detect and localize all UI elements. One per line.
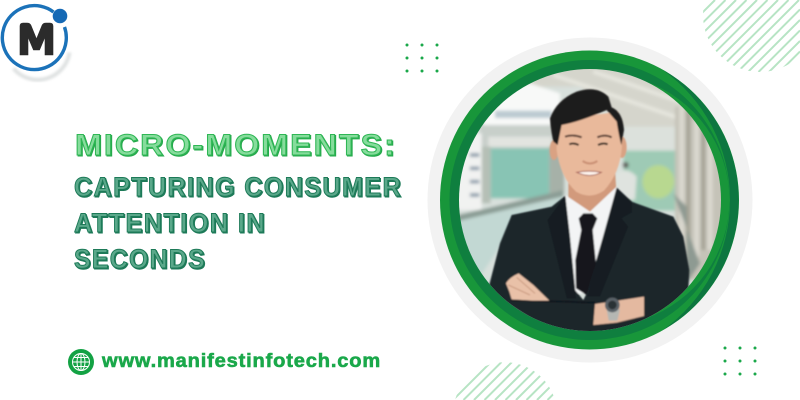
decorative striped circle: bottom <box>455 362 554 400</box>
watch <box>605 298 620 321</box>
subtitle: SECONDS <box>74 244 206 274</box>
outer pale ring <box>428 38 752 362</box>
forearm right <box>593 297 644 325</box>
logo dot <box>53 9 67 23</box>
title: Micro-Moments: MICRO-MOMENTS: <box>75 129 397 162</box>
website url: www.manifestinfotech.com <box>101 350 381 372</box>
green ring <box>440 50 739 350</box>
lapels <box>547 188 632 298</box>
ears <box>550 140 558 160</box>
subtitle: CAPTURING CONSUMER <box>74 172 402 202</box>
icon: globe <box>68 349 94 375</box>
logo letter M <box>20 23 53 55</box>
face <box>557 112 622 196</box>
person <box>488 89 689 335</box>
logo shadow <box>14 52 70 80</box>
hair <box>550 89 624 145</box>
hand left <box>506 273 549 301</box>
logo <box>2 6 70 80</box>
subtitle: ATTENTION IN <box>74 208 266 238</box>
shirt <box>565 187 617 293</box>
neck <box>568 174 617 212</box>
sleeve crease <box>511 300 595 303</box>
photo background <box>453 63 727 337</box>
eyes and brows <box>565 135 612 137</box>
logo ring <box>2 6 66 70</box>
photo <box>453 63 727 337</box>
dot grid: top <box>406 44 438 72</box>
decorative striped circle: top right <box>700 0 800 72</box>
subtitle <box>74 172 402 274</box>
suit <box>488 187 689 335</box>
portrait medallion <box>428 38 752 362</box>
nose shadow <box>583 161 597 163</box>
smile <box>577 171 601 175</box>
dot grid: bottom right <box>724 346 756 376</box>
website row <box>68 349 381 375</box>
tie <box>575 213 597 295</box>
